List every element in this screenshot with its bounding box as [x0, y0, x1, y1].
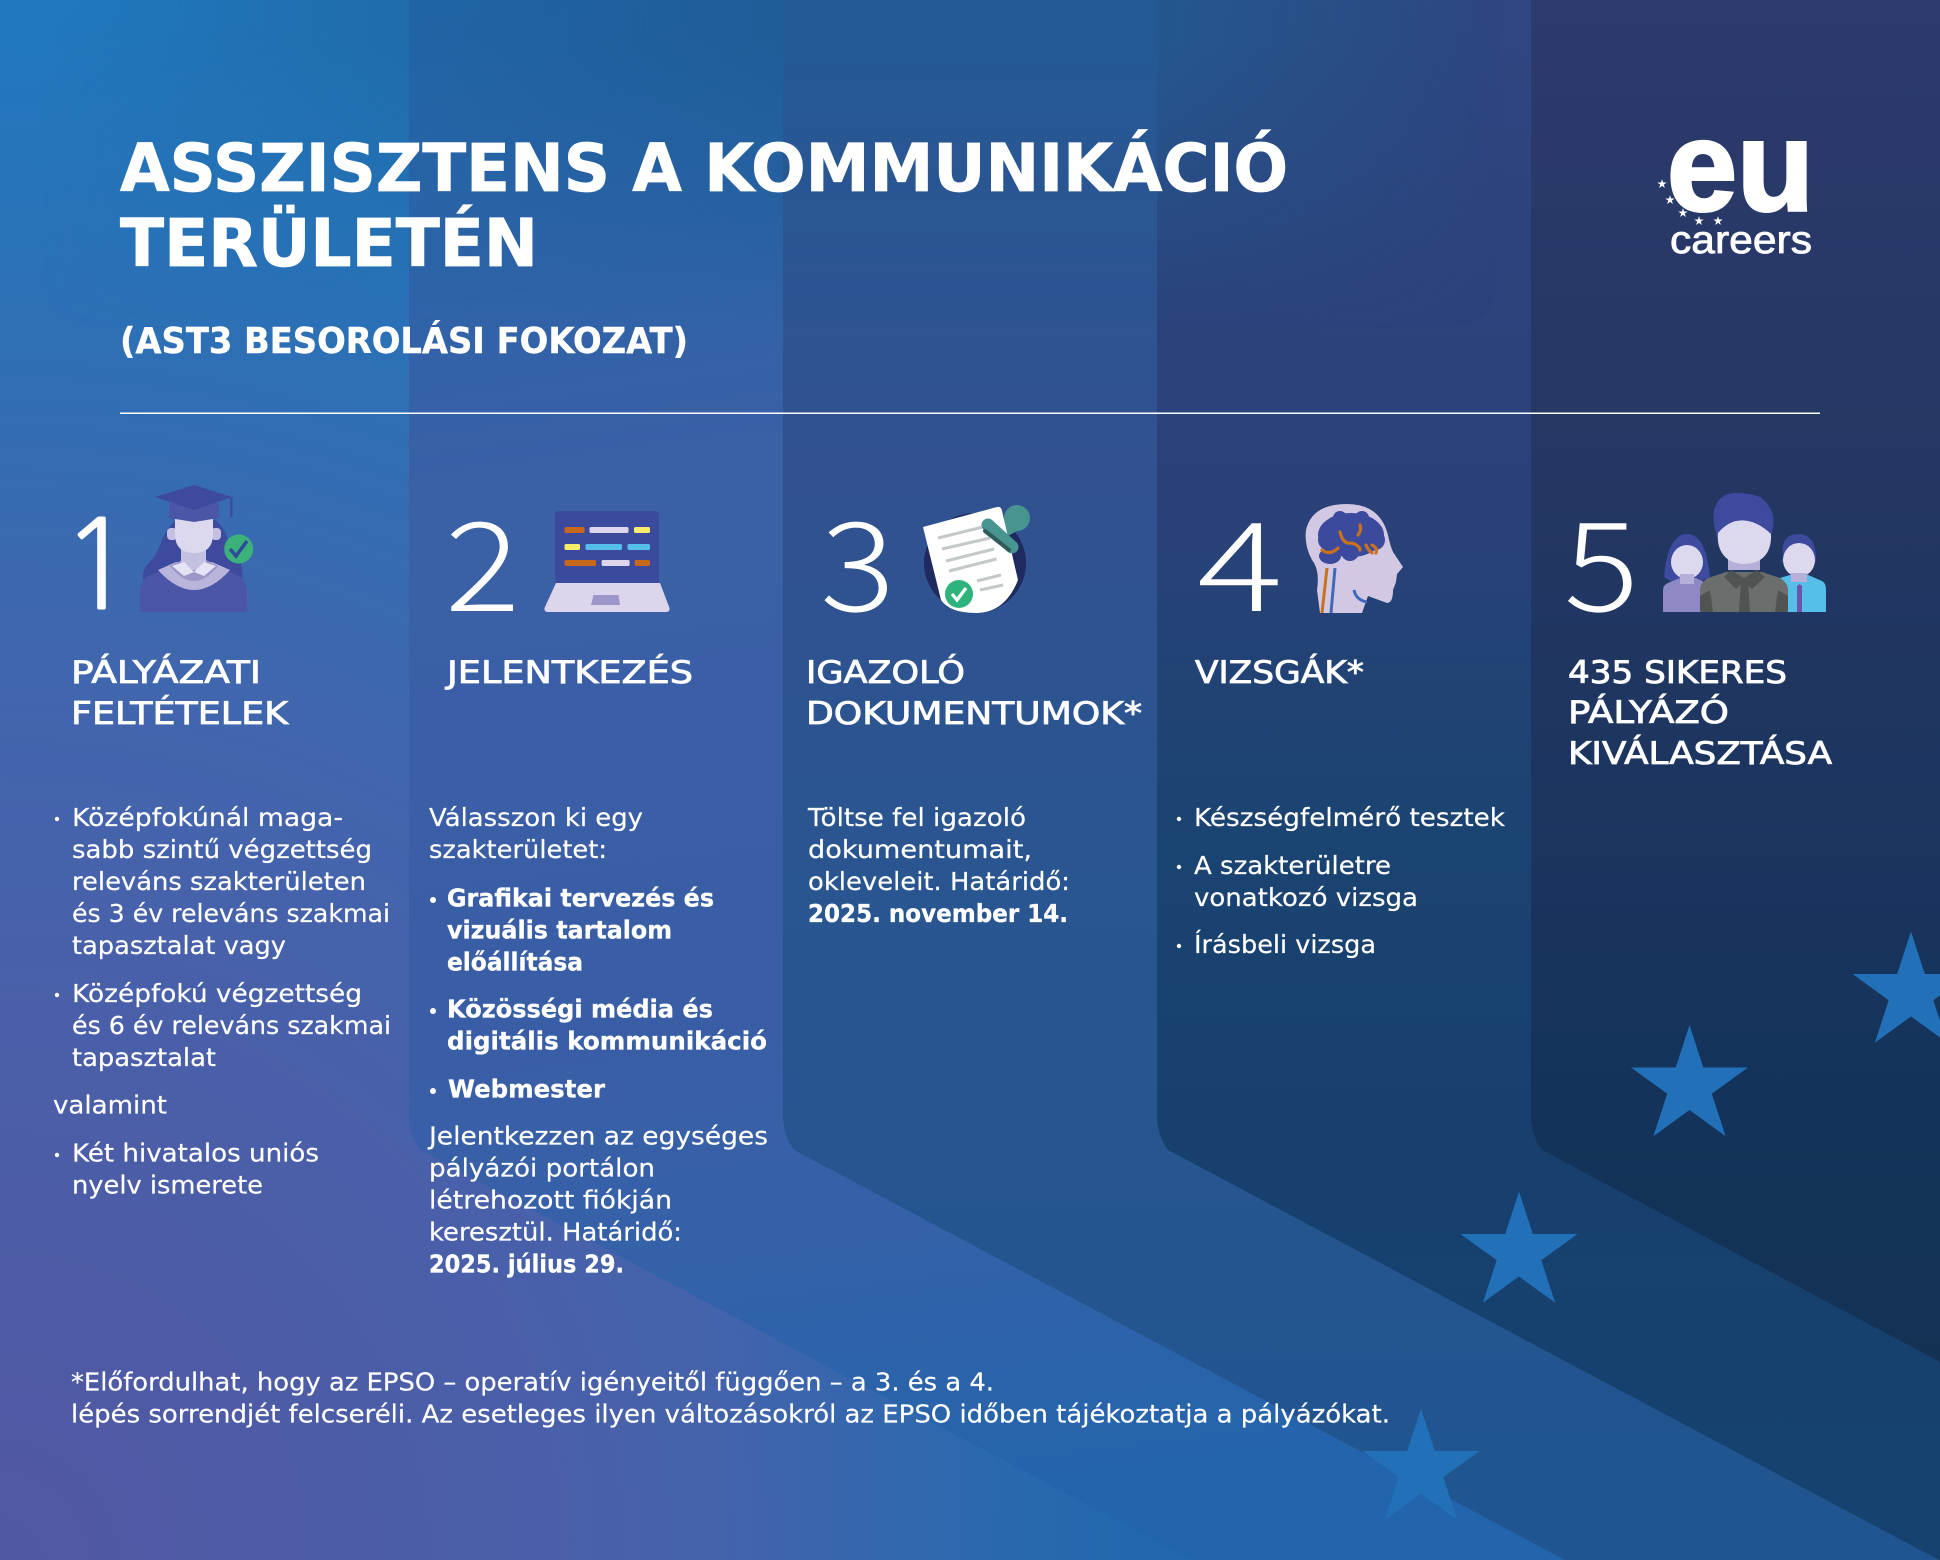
step 4 body text — [1177, 803, 1506, 959]
footnote — [71, 1368, 1390, 1428]
step 2 body text: Válasszon ki egy — [429, 803, 643, 832]
icon: laptop — [544, 511, 670, 612]
step 2 body text: Webmester — [448, 1074, 606, 1104]
step 2 body text — [427, 803, 768, 1278]
step 3 body text — [807, 803, 1070, 928]
step 3 body text: okleveleit. Határidő: — [808, 867, 1070, 896]
step 2 body text: Közösségi média és — [447, 994, 713, 1024]
subtitle: (AST3 BESOROLÁSI FOKOZAT) — [120, 320, 688, 362]
step 1 body text: sabb szintű végzettség — [72, 835, 372, 864]
step 2 body text: vizuális tartalom — [447, 916, 672, 944]
title: ASSZISZTENS A KOMMUNIKÁCIÓ — [120, 129, 1288, 207]
step 2 body text: Jelentkezzen az egységes — [427, 1122, 768, 1150]
step 1 number: 1 — [60, 503, 135, 627]
step 3 body text: Töltse fel igazoló — [807, 803, 1026, 832]
step 1 body text: valamint — [53, 1090, 167, 1120]
step 4 body text: A szakterületre — [1194, 851, 1391, 880]
step 3 heading: IGAZOLÓ — [806, 654, 965, 691]
step 3 body text: dokumentumait, — [808, 835, 1032, 864]
step 4 body text: Írásbeli vizsga — [1194, 930, 1376, 959]
step 5 heading: 435 SIKERES — [1568, 655, 1787, 691]
step 1 body text: és 6 év releváns szakmai — [72, 1011, 391, 1040]
step 2 body text: Grafikai tervezés és — [447, 884, 714, 912]
step 1 body text: releváns szakterületen — [72, 867, 366, 896]
step 2 body text: keresztül. Határidő: — [429, 1218, 682, 1246]
step 1 body text: Középfokúnál maga- — [72, 803, 343, 832]
step 2 body text: pályázói portálon — [429, 1154, 655, 1182]
icon: head with brain — [1306, 504, 1403, 613]
step 3 heading: DOKUMENTUMOK* — [806, 696, 1142, 732]
step 1 heading — [71, 655, 289, 732]
icon: three people — [1663, 493, 1826, 612]
title: TERÜLETÉN — [120, 204, 538, 282]
step 2 body text: 2025. július 29. — [429, 1250, 624, 1278]
step 2 body text: digitális kommunikáció — [447, 1026, 767, 1056]
step 1 body text: Középfokú végzettség — [72, 979, 362, 1008]
step 5 heading: KIVÁLASZTÁSA — [1568, 736, 1832, 772]
panel: step 5 column band — [1531, 0, 1940, 1362]
step 1 body text: és 3 év releváns szakmai — [72, 899, 390, 928]
panel: step 4 column band — [1157, 0, 1940, 1560]
step 2 heading: JELENTKEZÉS — [445, 655, 693, 691]
step 3 number: 3 — [820, 467, 895, 647]
step 4 body text: vonatkozó vizsga — [1194, 883, 1418, 912]
panel: step 3 column band — [783, 0, 1940, 1560]
step 4 number: 4 — [1197, 467, 1283, 647]
step 4 body text: Készségfelmérő tesztek — [1194, 803, 1506, 832]
logo: EU careers: eu — [1667, 96, 1814, 238]
step 2 body text: előállítása — [447, 948, 583, 976]
step 1 heading: FELTÉTELEK — [71, 696, 289, 732]
step 2 body text: létrehozott fiókján — [429, 1186, 672, 1214]
step 4 heading: VIZSGÁK* — [1195, 655, 1364, 691]
step 1 body text: nyelv ismerete — [72, 1170, 263, 1200]
footnote: *Előfordulhat, hogy az EPSO – operatív igényeitől függően – a 3. és a 4. — [71, 1368, 994, 1396]
step 1 body text: tapasztalat — [72, 1043, 216, 1072]
step 1 body text — [53, 803, 391, 1200]
step 3 body text: 2025. november 14. — [808, 899, 1068, 928]
background gradient — [0, 0, 1190, 1560]
step 3 heading — [806, 654, 1142, 732]
title — [120, 129, 1288, 282]
step 2 number: 2 — [445, 467, 520, 647]
decorative EU stars — [1362, 932, 1940, 1520]
logo: EU careers: careers — [1670, 219, 1812, 262]
step 1 body text: Két hivatalos uniós — [72, 1138, 319, 1168]
icon: document with stamp — [923, 505, 1030, 613]
step 5 number: 5 — [1564, 467, 1639, 647]
footnote: lépés sorrendjét felcseréli. Az esetleges ilyen változásokról az EPSO időben tájékoztatja a pályázókat. — [71, 1400, 1390, 1428]
divider — [120, 412, 1820, 414]
step 2 body text: szakterületet: — [429, 835, 607, 864]
step 5 heading — [1568, 655, 1832, 772]
icon: graduate with check — [140, 485, 253, 612]
step 1 body text: tapasztalat vagy — [72, 931, 286, 960]
step 5 heading: PÁLYÁZÓ — [1568, 694, 1729, 731]
step 1 heading: PÁLYÁZATI — [71, 655, 261, 691]
panel: step 2 column band — [409, 0, 1564, 1560]
